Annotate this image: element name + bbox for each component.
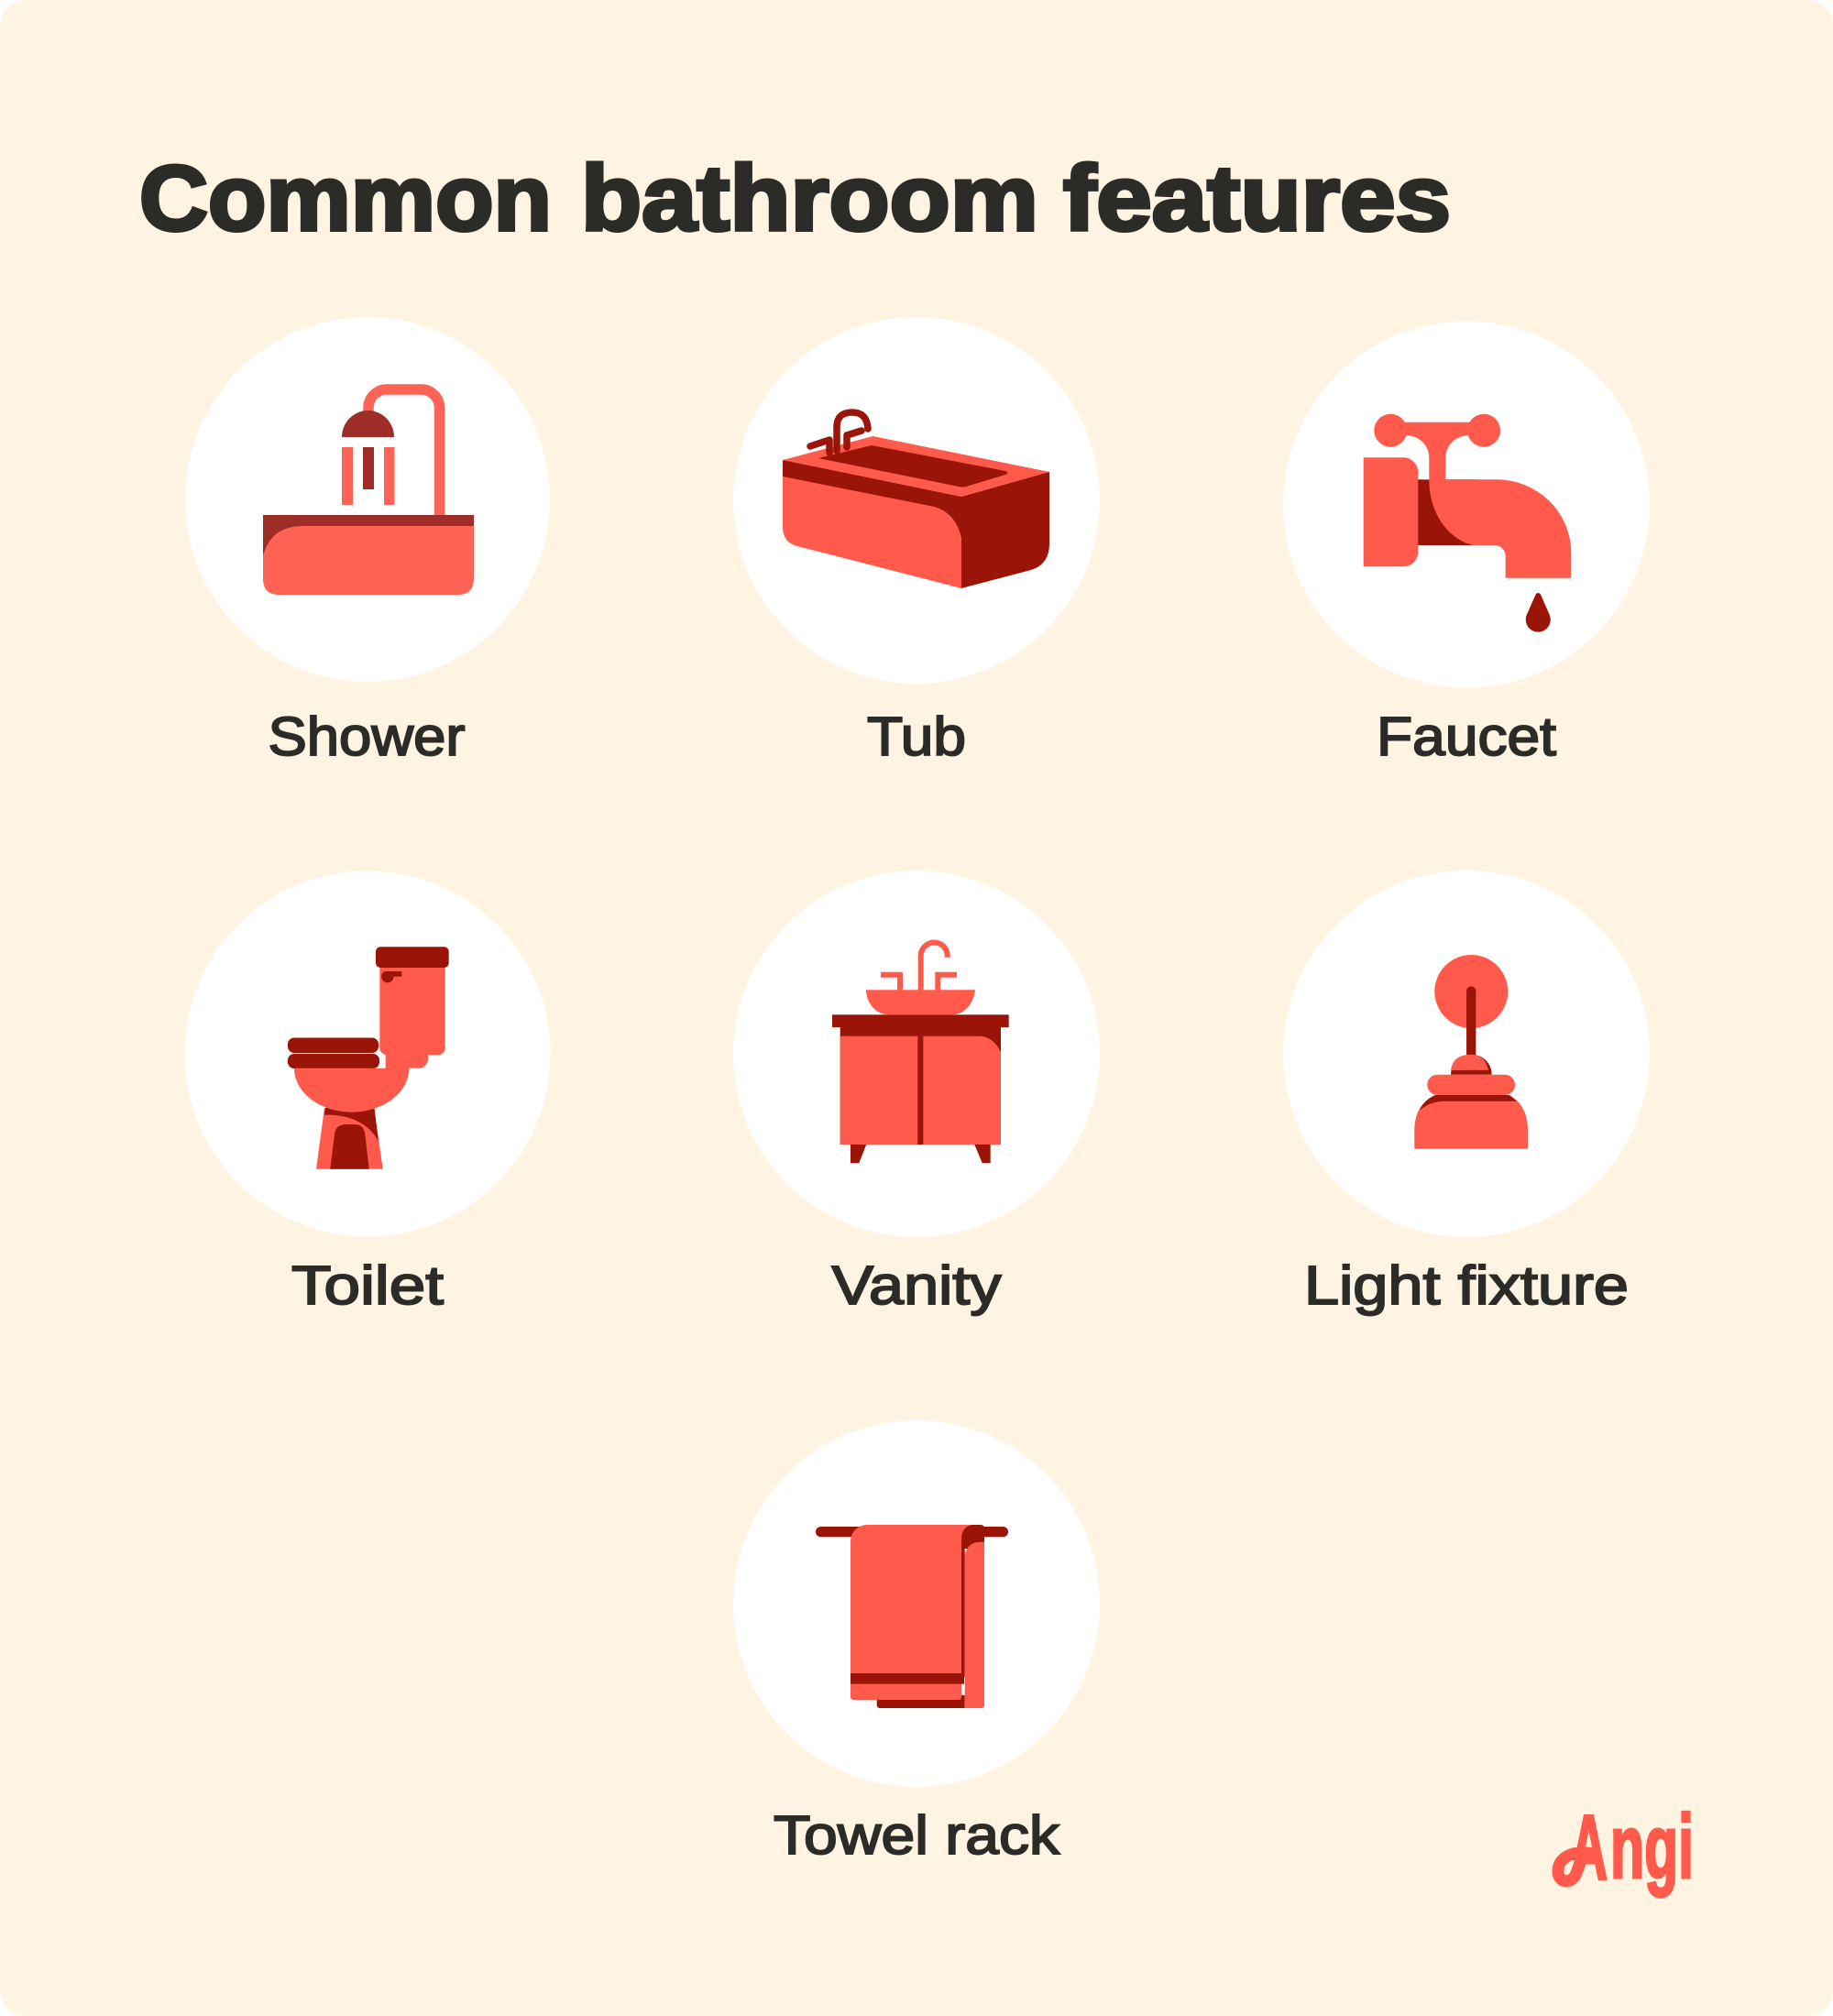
- logo: Angi: [1558, 1796, 1694, 1899]
- logo: Angi: A: [1570, 1796, 1608, 1899]
- icon: vanity: [832, 943, 1009, 1163]
- title: [139, 148, 1451, 250]
- circle: shower background: [185, 317, 550, 682]
- circle: light fixture background: [1283, 871, 1650, 1237]
- label: vanity: Vanity: [832, 1255, 1002, 1316]
- label: faucet: Faucet: [1377, 707, 1556, 767]
- panel: light fixture: [1283, 871, 1650, 1316]
- circle: vanity background: [733, 871, 1100, 1237]
- circle: tub background: [733, 317, 1100, 684]
- label: toilet: Toilet: [291, 1255, 444, 1316]
- circle: faucet background: [1283, 321, 1650, 687]
- icon: toilet: [288, 947, 449, 1169]
- panel: faucet: [1283, 321, 1650, 767]
- icon: tub: [783, 412, 1049, 588]
- icon: towel rack: [816, 1525, 1008, 1708]
- label: tub: Tub: [867, 707, 966, 767]
- label: towel rack: Towel rack: [774, 1805, 1060, 1866]
- panel: tub: [733, 317, 1100, 767]
- panel: toilet: [185, 871, 550, 1316]
- icon: faucet: [1364, 414, 1571, 632]
- panel: vanity: [733, 871, 1100, 1316]
- circle: toilet background: [185, 871, 550, 1237]
- panel: shower: [185, 317, 550, 767]
- label: shower: Shower: [268, 707, 466, 767]
- title: bathroom: [581, 148, 1038, 250]
- circle: towel rack background: [733, 1420, 1100, 1787]
- icon: shower: [263, 389, 474, 595]
- logo: Angi: ngi: [1610, 1796, 1694, 1897]
- label: light fixture: Light fixture: [1304, 1255, 1629, 1316]
- title: Common: [139, 148, 552, 250]
- title: features: [1063, 148, 1451, 250]
- panel: towel rack: [733, 1420, 1100, 1866]
- icon: light fixture: [1414, 955, 1528, 1149]
